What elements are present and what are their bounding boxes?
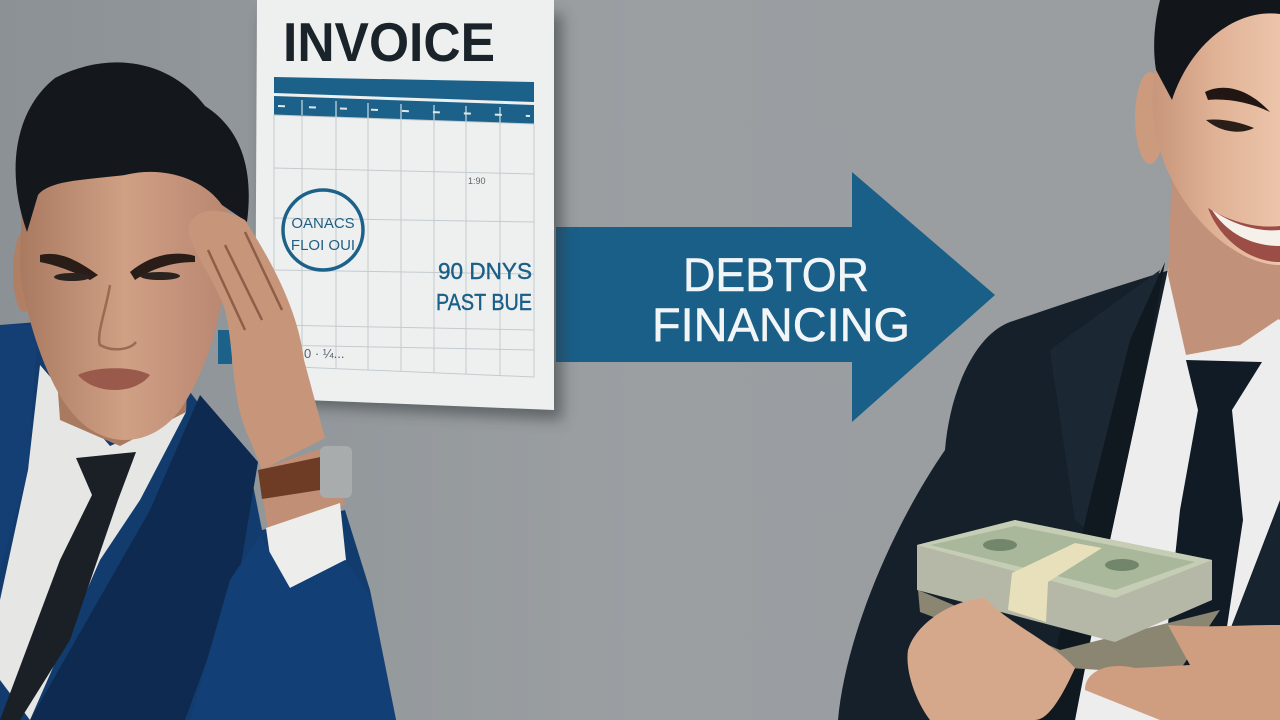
tie — [0, 452, 136, 720]
person: smiling businessman — [838, 0, 1280, 720]
cuff — [266, 503, 346, 588]
cash stack — [917, 520, 1220, 672]
neck — [1168, 170, 1280, 355]
invoice table: 0 · ¼... — [304, 346, 344, 361]
person: stressed businessman — [0, 62, 396, 720]
arrow label — [652, 248, 910, 351]
past due note: 90 DNYS — [438, 258, 532, 284]
arrow label: FINANCING — [652, 298, 910, 351]
shirt — [1075, 260, 1280, 720]
wristwatch — [258, 446, 352, 499]
raised hand — [188, 211, 325, 470]
invoice table — [274, 77, 534, 377]
suit — [0, 322, 396, 720]
left hand — [907, 598, 1075, 720]
face — [20, 146, 229, 440]
arrow label: DEBTOR — [683, 248, 869, 301]
eye and brow — [1205, 88, 1270, 112]
ear — [1135, 72, 1165, 164]
suit — [838, 270, 1280, 720]
invoice table: 1:90 — [468, 176, 486, 186]
face — [1152, 4, 1280, 265]
right hand — [1085, 625, 1280, 720]
tie — [1160, 360, 1262, 700]
past due note — [436, 258, 532, 315]
invoice heading: INVOICE — [283, 11, 495, 73]
forearm — [258, 445, 345, 530]
hair — [16, 62, 249, 232]
stamp circle: FLOI OUI — [291, 237, 355, 254]
invoice document — [255, 0, 562, 420]
smile — [1208, 208, 1280, 262]
neck — [55, 330, 190, 446]
shirt — [0, 365, 186, 720]
arrow: debtor financing — [218, 172, 995, 422]
stamp circle — [283, 190, 363, 270]
brows, eyes, mouth — [40, 254, 195, 390]
hair — [1154, 0, 1280, 100]
sleeve — [190, 535, 396, 720]
stamp circle: OANACS — [291, 215, 355, 232]
ear — [13, 232, 35, 312]
past due note: PAST BUE — [436, 289, 532, 315]
